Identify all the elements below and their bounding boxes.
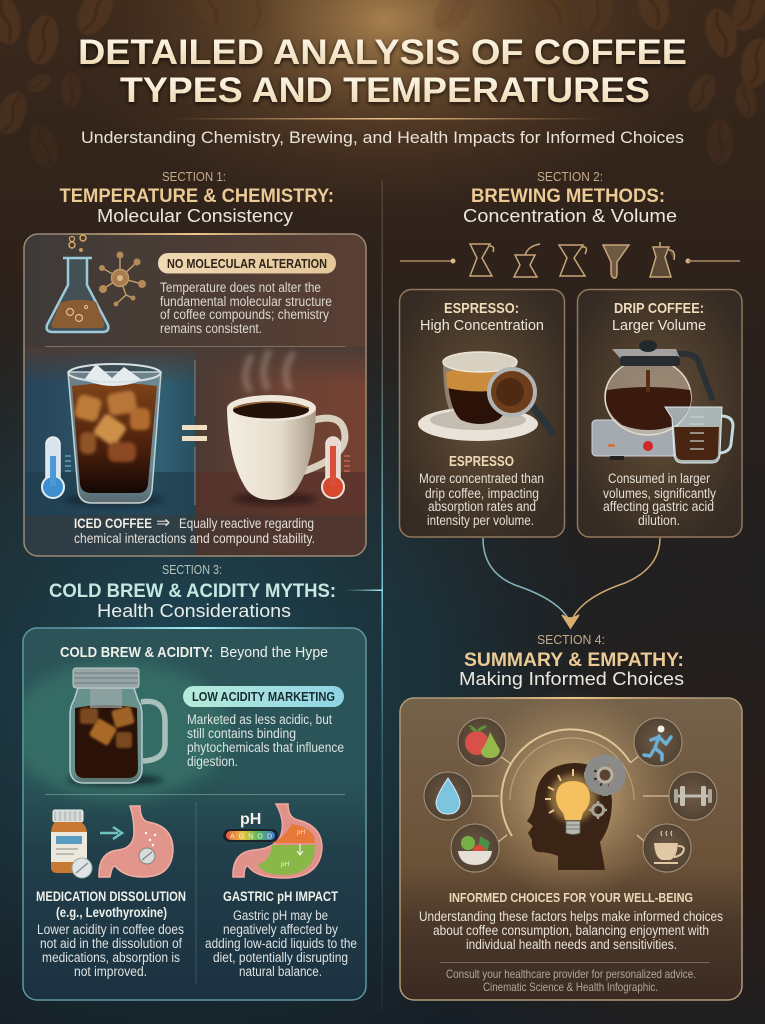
text: medication dissolution: not aid in the dissolution of xyxy=(40,936,182,951)
caption: iced coffee: Equally reactive regarding xyxy=(179,515,314,531)
panel: drip coffee xyxy=(578,290,742,537)
cold brew mason jar xyxy=(67,668,165,786)
icon: medication bottle xyxy=(51,810,92,878)
icon: molecule xyxy=(99,252,146,306)
icon: pour-over carafe xyxy=(559,245,586,276)
heading: drip coffee: Larger Volume xyxy=(612,317,706,334)
head silhouette with lightbulb xyxy=(527,763,612,870)
footer note: Consult your healthcare provider for personalized advice. xyxy=(446,967,696,981)
section 1 heading: TEMPERATURE & CHEMISTRY: xyxy=(60,185,334,207)
text: temperature does not alter: of coffee compounds; chemistry xyxy=(160,307,329,322)
text: temperature does not alter xyxy=(160,280,332,336)
caption: iced coffee: ⇒ xyxy=(156,513,170,532)
heading: espresso xyxy=(420,300,544,334)
icon: stomach with pH levels: pH xyxy=(281,861,290,868)
text: espresso description: absorption rates and xyxy=(428,499,536,514)
section 2 heading xyxy=(463,170,677,226)
text: medication dissolution: MEDICATION DISSOLUTION xyxy=(36,889,186,904)
title: TYPES AND TEMPERATURES xyxy=(120,71,650,110)
measuring cup xyxy=(665,407,733,463)
icon: stomach with pH levels xyxy=(233,804,322,878)
text: gastric pH impact: negatively affected by xyxy=(223,922,338,937)
heading: cold brew and acidity xyxy=(60,644,328,661)
section 1 heading: SECTION 1: xyxy=(162,170,226,184)
heading: cold brew and acidity: COLD BREW & ACIDITY: xyxy=(60,644,213,661)
arrows: converging to section 4 xyxy=(483,538,660,628)
text: marketed as less acidic: still contains binding xyxy=(187,726,296,741)
text: medication dissolution xyxy=(36,889,186,979)
text: marketed as less acidic: digestion. xyxy=(187,754,238,769)
text: espresso description: intensity per volume. xyxy=(427,513,534,528)
iced coffee glass xyxy=(64,364,164,506)
brewing method icon row xyxy=(400,242,740,278)
text: marketed as less acidic xyxy=(187,712,344,769)
icon: pH scale: AGNOD xyxy=(230,834,272,840)
icon: grinder xyxy=(514,244,540,277)
coffee pot on hot plate xyxy=(592,340,712,460)
equals sign xyxy=(182,360,207,505)
heading: drip coffee: DRIP COFFEE: xyxy=(614,300,704,317)
text: gastric pH impact: GASTRIC pH IMPACT xyxy=(223,889,339,904)
section 2 heading: BREWING METHODS: xyxy=(471,185,665,207)
title divider xyxy=(170,118,605,120)
panel: summary and empathy xyxy=(400,690,742,1000)
text: drip coffee description: dilution. xyxy=(638,513,680,528)
heading: espresso: High Concentration xyxy=(420,317,544,334)
pill: no molecular alteration: NO MOLECULAR ALTERATION xyxy=(167,257,327,271)
text: medication dissolution: medications, absorption is xyxy=(42,950,180,965)
text: espresso description: drip coffee, impacting xyxy=(425,486,539,501)
text: gastric pH impact xyxy=(205,889,357,979)
text: informed choices: Understanding these factors helps make informed choices xyxy=(419,909,723,924)
text: drip coffee description: Consumed in larger xyxy=(608,471,710,486)
text: medication dissolution: Lower acidity in coffee does xyxy=(37,922,184,937)
arrow: to stomach xyxy=(100,827,122,839)
connector lines xyxy=(472,729,669,842)
pill: low acidity marketing: LOW ACIDITY MARKETING xyxy=(192,689,335,704)
panel: espresso xyxy=(400,290,564,537)
icon: flask xyxy=(47,235,108,332)
footer note: Cinematic Science & Health Infographic. xyxy=(483,980,658,994)
icon: water drop xyxy=(424,772,472,820)
text: drip coffee description: affecting gastric acid xyxy=(603,499,714,514)
text: gastric pH impact: adding low-acid liquids to the xyxy=(205,936,357,951)
text: drip coffee description xyxy=(603,471,716,528)
icon: gears xyxy=(584,754,626,819)
heading: espresso: ESPRESSO: xyxy=(444,300,519,317)
icon: hot thermometer xyxy=(322,437,350,498)
steam xyxy=(245,350,294,392)
text: marketed as less acidic: phytochemicals that influence xyxy=(187,740,344,755)
title: DETAILED ANALYSIS OF COFFEE xyxy=(78,33,687,72)
icon: pH scale: pH xyxy=(240,811,261,828)
icon: stomach with tablet xyxy=(99,806,173,877)
icon: stomach with pH levels: pH xyxy=(297,829,306,836)
text: espresso description: More concentrated than xyxy=(419,471,544,486)
panel: cold brew and acidity xyxy=(8,627,366,1000)
icon: dumbbell xyxy=(669,772,717,820)
pill: low acidity marketing xyxy=(183,686,344,707)
section 3 heading: Health Considerations xyxy=(97,601,291,621)
section 3 heading xyxy=(49,563,336,621)
text: informed choices xyxy=(419,890,723,952)
text: gastric pH impact: Gastric pH may be xyxy=(233,908,328,923)
text: gastric pH impact: natural balance. xyxy=(239,964,322,979)
section 4 heading: Making Informed Choices xyxy=(459,669,684,689)
panel: temperature and chemistry xyxy=(24,233,366,556)
text: temperature does not alter: Temperature does not alter the xyxy=(160,280,321,295)
text: medication dissolution: (e.g., Levothyroxine) xyxy=(56,905,167,920)
connector glow from section 3 xyxy=(345,590,382,591)
icon: pH scale xyxy=(223,811,278,842)
text: espresso description xyxy=(419,454,544,528)
section 4 heading: SUMMARY & EMPATHY: xyxy=(464,649,684,671)
text: informed choices: INFORMED CHOICES FOR YOUR WELL-BEING xyxy=(449,890,693,905)
caption: iced coffee: chemical interactions and compound stability. xyxy=(74,530,315,546)
caption: iced coffee: ICED COFFEE xyxy=(74,515,152,531)
text: temperature does not alter: fundamental molecular structure xyxy=(160,294,332,309)
icon: dripper xyxy=(603,245,629,278)
title xyxy=(78,33,687,110)
section 3 heading: SECTION 3: xyxy=(162,563,222,577)
center vertical divider xyxy=(382,180,383,1010)
text: gastric pH impact: diet, potentially disrupting xyxy=(213,950,348,965)
text: medication dissolution: not improved. xyxy=(74,964,147,979)
footer note xyxy=(446,967,696,994)
section 3 heading: COLD BREW & ACIDITY MYTHS: xyxy=(49,580,336,602)
section 1 heading: Molecular Consistency xyxy=(97,206,293,226)
icon: runner xyxy=(634,718,682,766)
espresso cup with magnifier xyxy=(418,352,552,441)
section 2 heading: Concentration & Volume xyxy=(463,206,677,226)
icon: food bowl xyxy=(451,824,499,872)
section 2 heading: SECTION 2: xyxy=(537,170,603,184)
section 4 heading xyxy=(459,633,684,689)
text: informed choices: individual health needs and sensitivities. xyxy=(466,937,677,952)
hot coffee cup xyxy=(227,395,345,505)
section 4 heading: SECTION 4: xyxy=(537,633,605,647)
icon: chemex xyxy=(470,244,494,276)
text: informed choices: about coffee consumption, balancing enjoyment with xyxy=(433,923,709,938)
heading: drip coffee xyxy=(612,300,706,334)
heading: cold brew and acidity: Beyond the Hype xyxy=(220,644,328,661)
background coffee beans xyxy=(0,0,765,173)
pill: no molecular alteration xyxy=(158,253,336,274)
icon: coffee cup xyxy=(643,824,691,872)
icon: moka pot xyxy=(650,242,674,277)
text: temperature does not alter: remains consistent. xyxy=(160,321,262,336)
text: marketed as less acidic: Marketed as less acidic, but xyxy=(187,712,332,727)
section 1 heading xyxy=(60,170,334,226)
caption: iced coffee xyxy=(74,513,315,546)
text: espresso description: ESPRESSO xyxy=(449,454,514,470)
subtitle: Understanding Chemistry, Brewing, and Health Impacts for Informed Choices xyxy=(81,128,684,147)
icon: cold thermometer xyxy=(42,437,71,498)
text: drip coffee description: volumes, significantly xyxy=(603,486,716,501)
icon: fruit xyxy=(458,718,506,766)
